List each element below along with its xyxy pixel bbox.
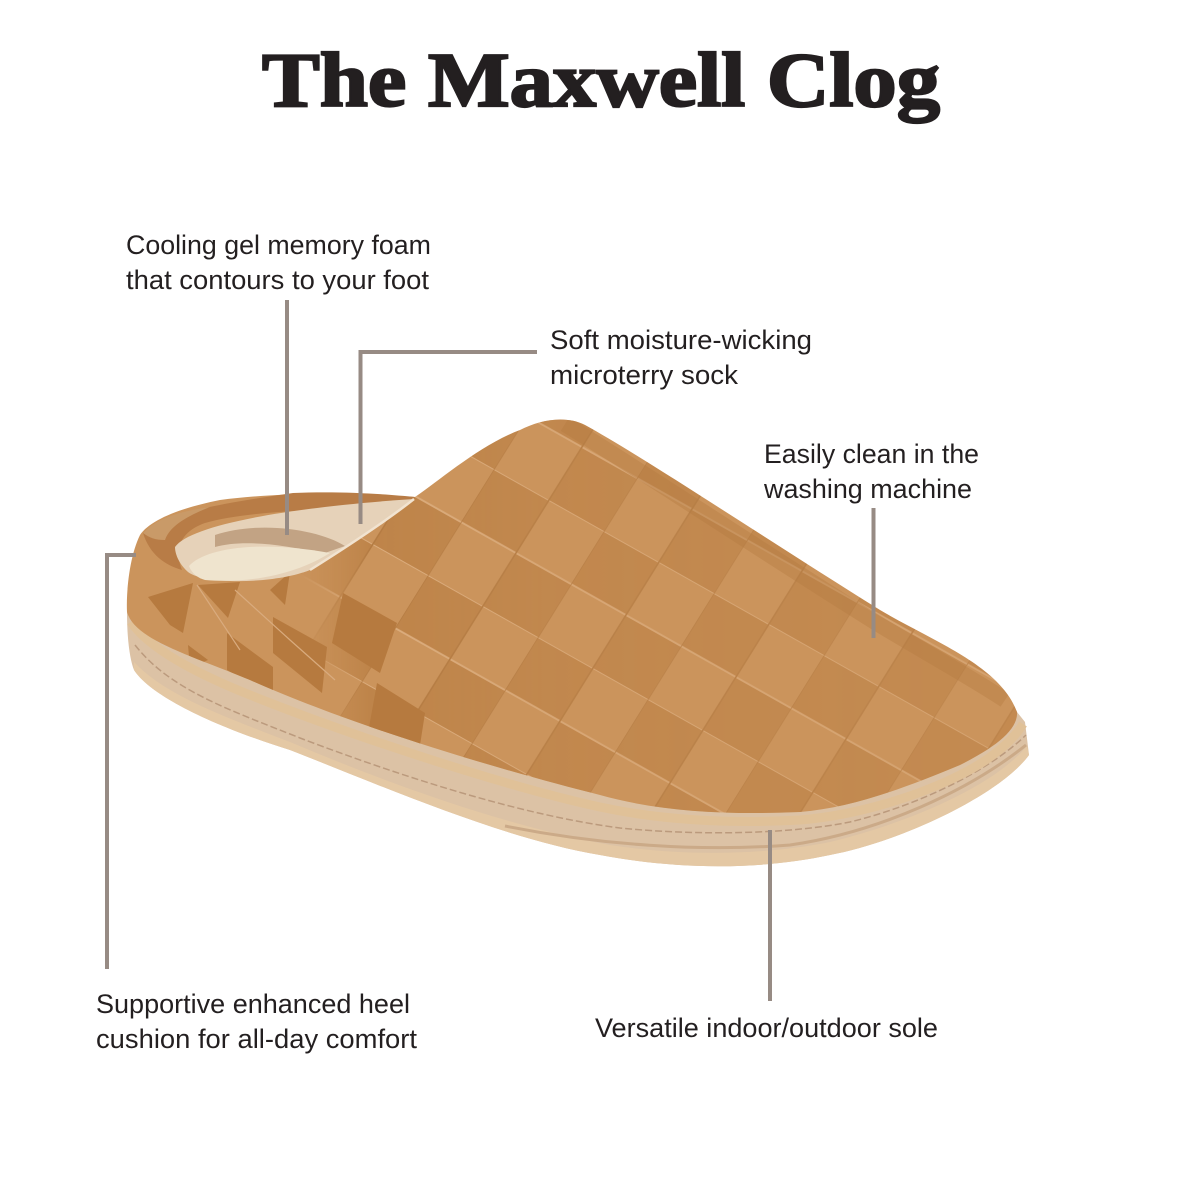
callout: washing machine: Easily clean in the bbox=[764, 439, 979, 469]
callout: heel cushion: cushion for all-day comfort bbox=[96, 1024, 417, 1054]
callout: washing machine bbox=[763, 439, 979, 638]
callout: heel cushion bbox=[96, 555, 417, 1054]
callout: cooling gel memory foam: Cooling gel memory foam bbox=[126, 230, 431, 260]
callout: cooling gel memory foam: that contours to your foot bbox=[126, 265, 429, 295]
collar and lining bbox=[143, 492, 415, 581]
callout: microterry sock bbox=[360, 325, 812, 524]
clog illustration bbox=[127, 400, 1030, 866]
quilted upper bbox=[127, 400, 1030, 830]
callout: washing machine: washing machine bbox=[763, 474, 972, 504]
callout: heel cushion: Supportive enhanced heel bbox=[96, 989, 410, 1019]
title: The Maxwell Clog bbox=[262, 37, 940, 123]
sole bbox=[127, 612, 1029, 866]
callout: cooling gel memory foam bbox=[126, 230, 431, 535]
callout: microterry sock: Soft moisture-wicking bbox=[550, 325, 812, 355]
callout: indoor/outdoor sole: Versatile indoor/outdoor sole bbox=[595, 1013, 938, 1043]
callout: microterry sock: microterry sock bbox=[550, 360, 739, 390]
